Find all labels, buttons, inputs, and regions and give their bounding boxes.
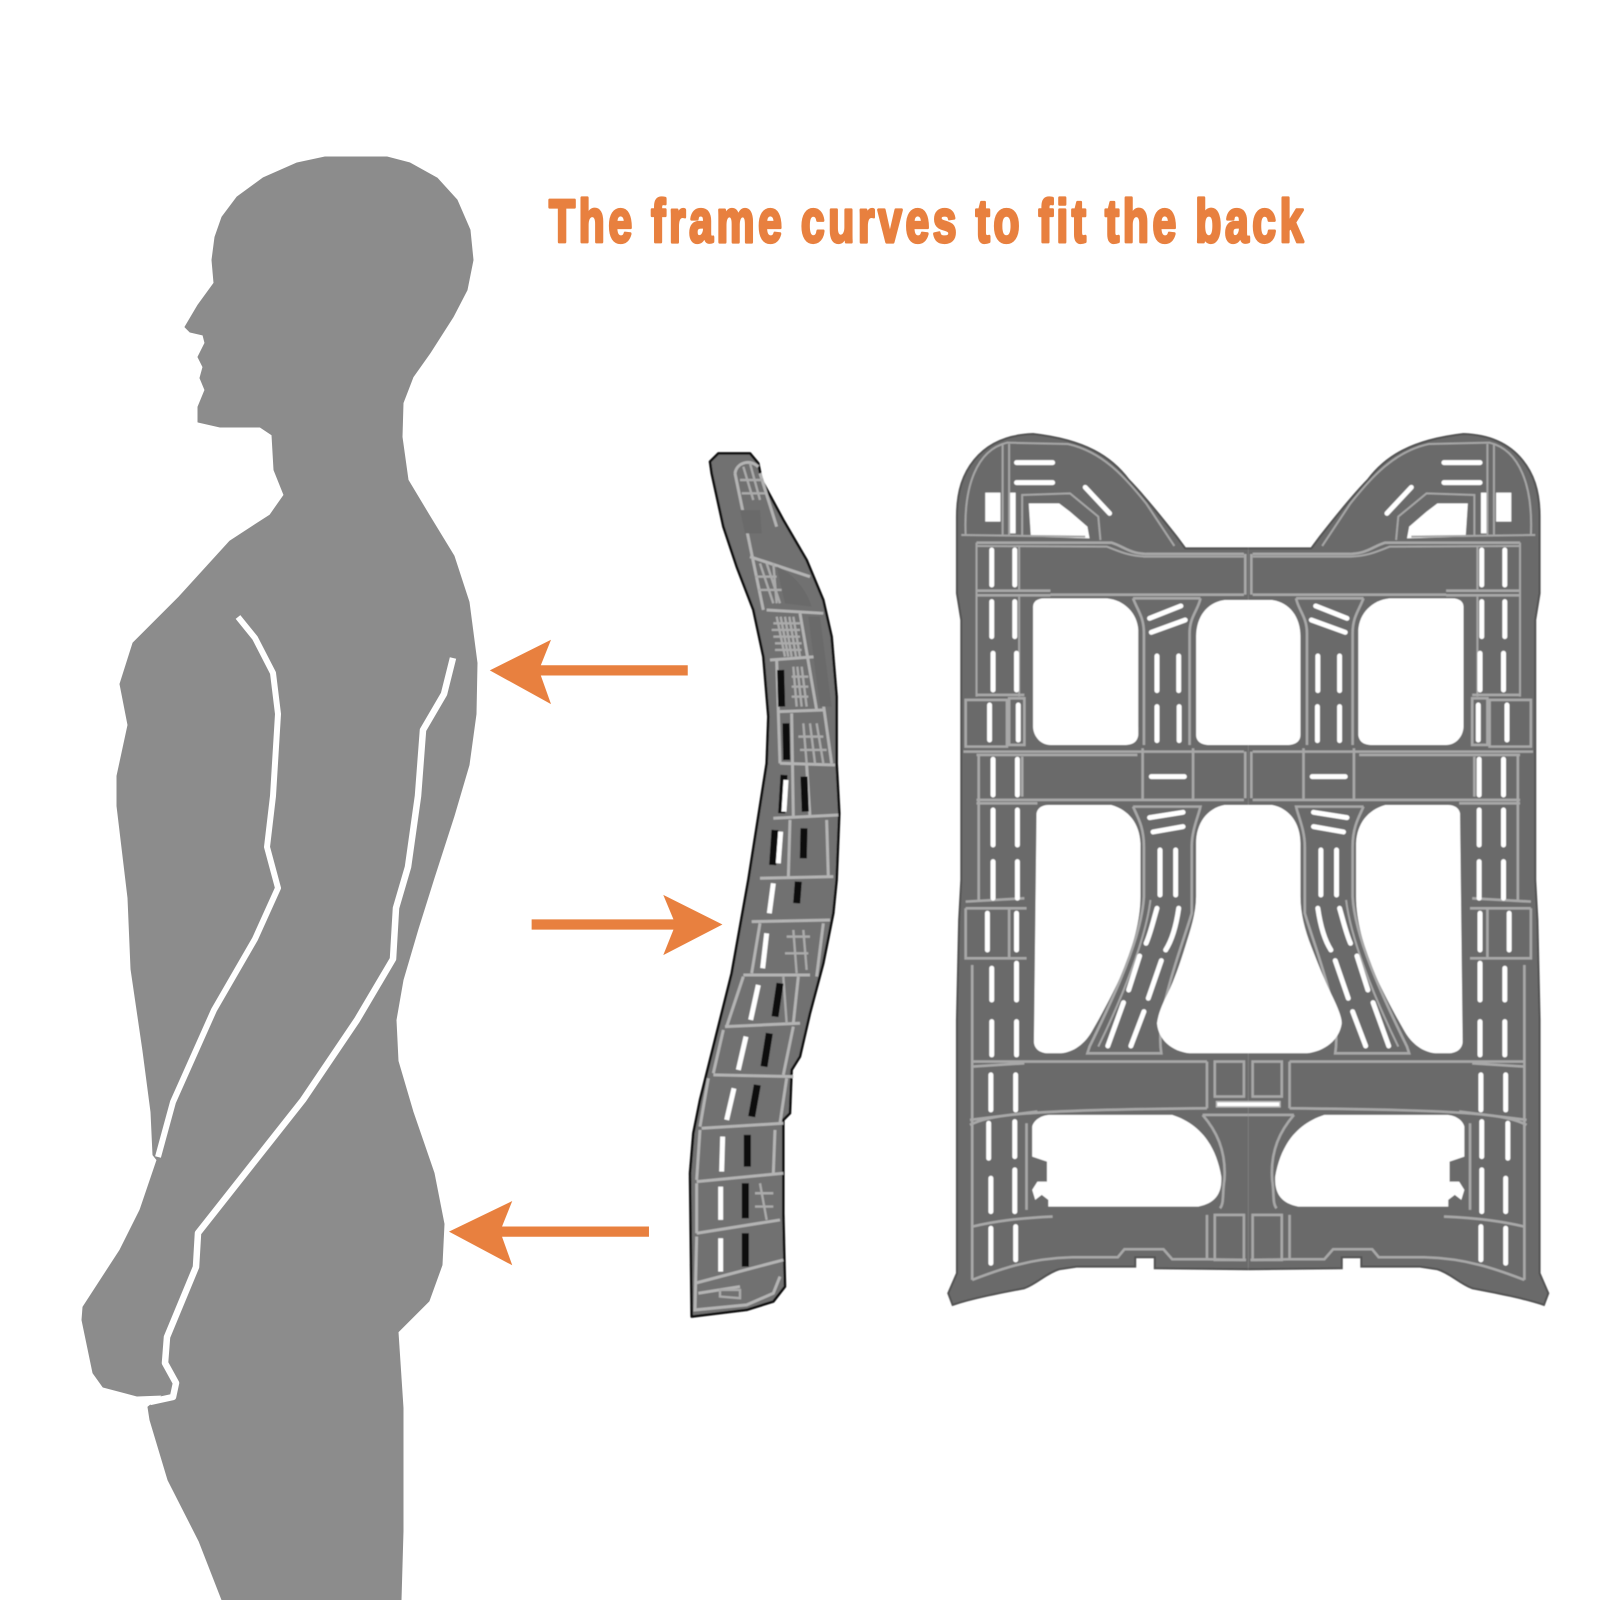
body — [82, 157, 477, 1600]
front arm outline — [158, 617, 278, 1157]
frame side view — [690, 453, 839, 1317]
right half — [1248, 434, 1548, 1305]
left half — [948, 434, 1248, 1305]
centre lower opening — [1157, 805, 1342, 1053]
frame front view — [948, 434, 1548, 1305]
side ribs — [695, 462, 838, 1310]
arrow: lumbar — [532, 895, 722, 955]
arrow: upper back — [490, 640, 688, 704]
centre slot — [1217, 1102, 1280, 1107]
title: The frame curves to fit the back — [549, 188, 1307, 255]
side slots — [745, 670, 805, 1267]
person silhouette — [82, 157, 477, 1600]
centre upper opening — [1196, 600, 1300, 745]
back arm outline — [150, 658, 453, 1402]
arrow: hips — [449, 1201, 649, 1265]
